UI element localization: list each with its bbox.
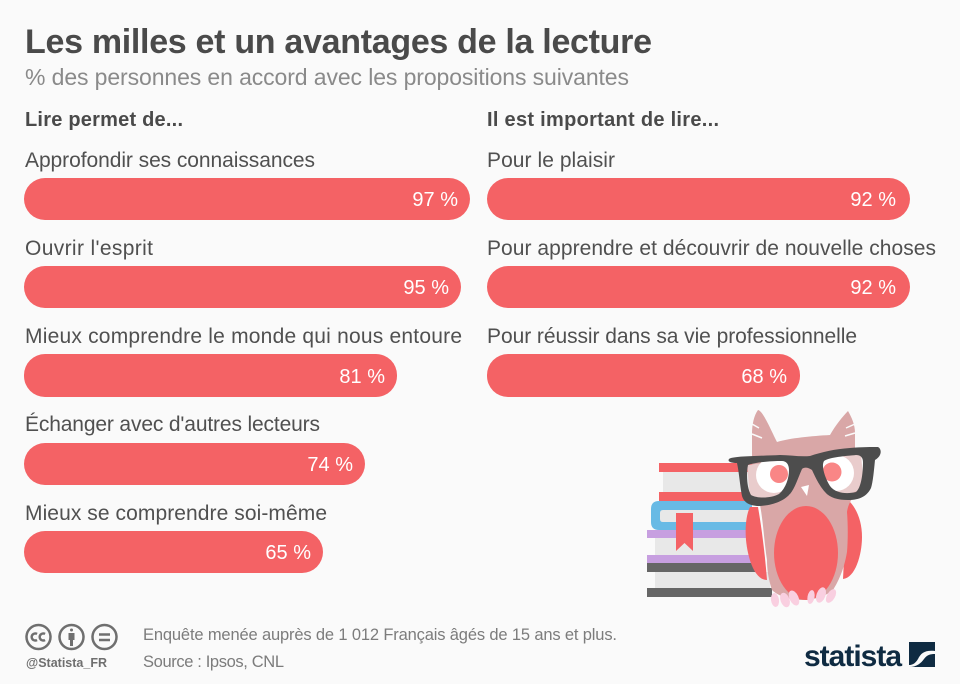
row: Mieux se comprendre soi-même	[24, 502, 327, 573]
source notes: Source : Ipsos, CNL	[143, 653, 284, 671]
row: Échanger avec d'autres lecteurs: Échanger avec d'autres lecteurs	[25, 413, 320, 436]
row: Pour réussir: 68 %	[741, 366, 787, 388]
heading: right column: Il est important de lire...	[487, 109, 719, 131]
row: Approfondir ses connaissances: Approfondir ses connaissances	[25, 149, 315, 172]
row: Mieux comprendre le monde: Mieux comprendre le monde qui nous entoure	[25, 325, 462, 348]
source notes: Enquête menée auprès de 1 012 Français âgés de 15 ans et plus.	[143, 626, 617, 644]
heading: left column: Lire permet de...	[25, 109, 183, 131]
owl feet	[770, 586, 838, 609]
row: Pour réussir: Pour réussir dans sa vie professionnelle	[487, 325, 857, 348]
owl eyes	[747, 460, 790, 500]
row: Pour le plaisir: 92 %	[850, 189, 896, 211]
row: Mieux se comprendre soi-même: 65 %	[265, 542, 311, 564]
row: Mieux comprendre le monde: 81 %	[339, 366, 385, 388]
row: Pour réussir	[487, 325, 857, 397]
row: Approfondir ses connaissances: 97 %	[412, 189, 458, 211]
owl wings	[746, 507, 767, 580]
row: Pour le plaisir: Pour le plaisir	[487, 149, 615, 172]
owl body	[752, 410, 857, 600]
icon: owl	[729, 410, 881, 609]
icon: cc license	[26, 625, 116, 649]
row: Mieux comprendre le monde	[24, 325, 462, 397]
owl belly	[774, 506, 838, 600]
title: Les milles et un avantages de la lecture	[25, 23, 652, 61]
row: Ouvrir l'esprit	[24, 237, 461, 308]
row: Échanger avec d'autres lecteurs: 74 %	[307, 454, 353, 476]
row: Pour le plaisir	[487, 149, 910, 220]
handle: @Statista_FR	[26, 656, 107, 670]
row: Pour apprendre et découvrir: Pour apprendre et découvrir de nouvelle choses	[487, 237, 936, 260]
icon: book stack	[647, 463, 772, 597]
statista logo: statista	[804, 640, 902, 673]
row: Pour apprendre et découvrir: 92 %	[850, 277, 896, 299]
illustration: owl on books	[647, 410, 881, 609]
row: Approfondir ses connaissances	[24, 149, 470, 220]
row: Mieux se comprendre soi-même: Mieux se comprendre soi-même	[25, 502, 327, 525]
owl glasses	[729, 447, 881, 506]
panel: Il est important de lire	[487, 109, 936, 397]
source notes	[143, 626, 617, 671]
subtitle: % des personnes en accord avec les propositions suivantes	[25, 64, 629, 90]
row: Pour apprendre et découvrir	[487, 237, 936, 308]
row: Ouvrir l'esprit: 95 %	[403, 277, 449, 299]
ear slits	[752, 424, 855, 438]
row: Échanger avec d'autres lecteurs	[24, 413, 365, 485]
panel: Lire permet de	[24, 109, 470, 573]
row: Ouvrir l'esprit: Ouvrir l'esprit	[25, 237, 153, 260]
